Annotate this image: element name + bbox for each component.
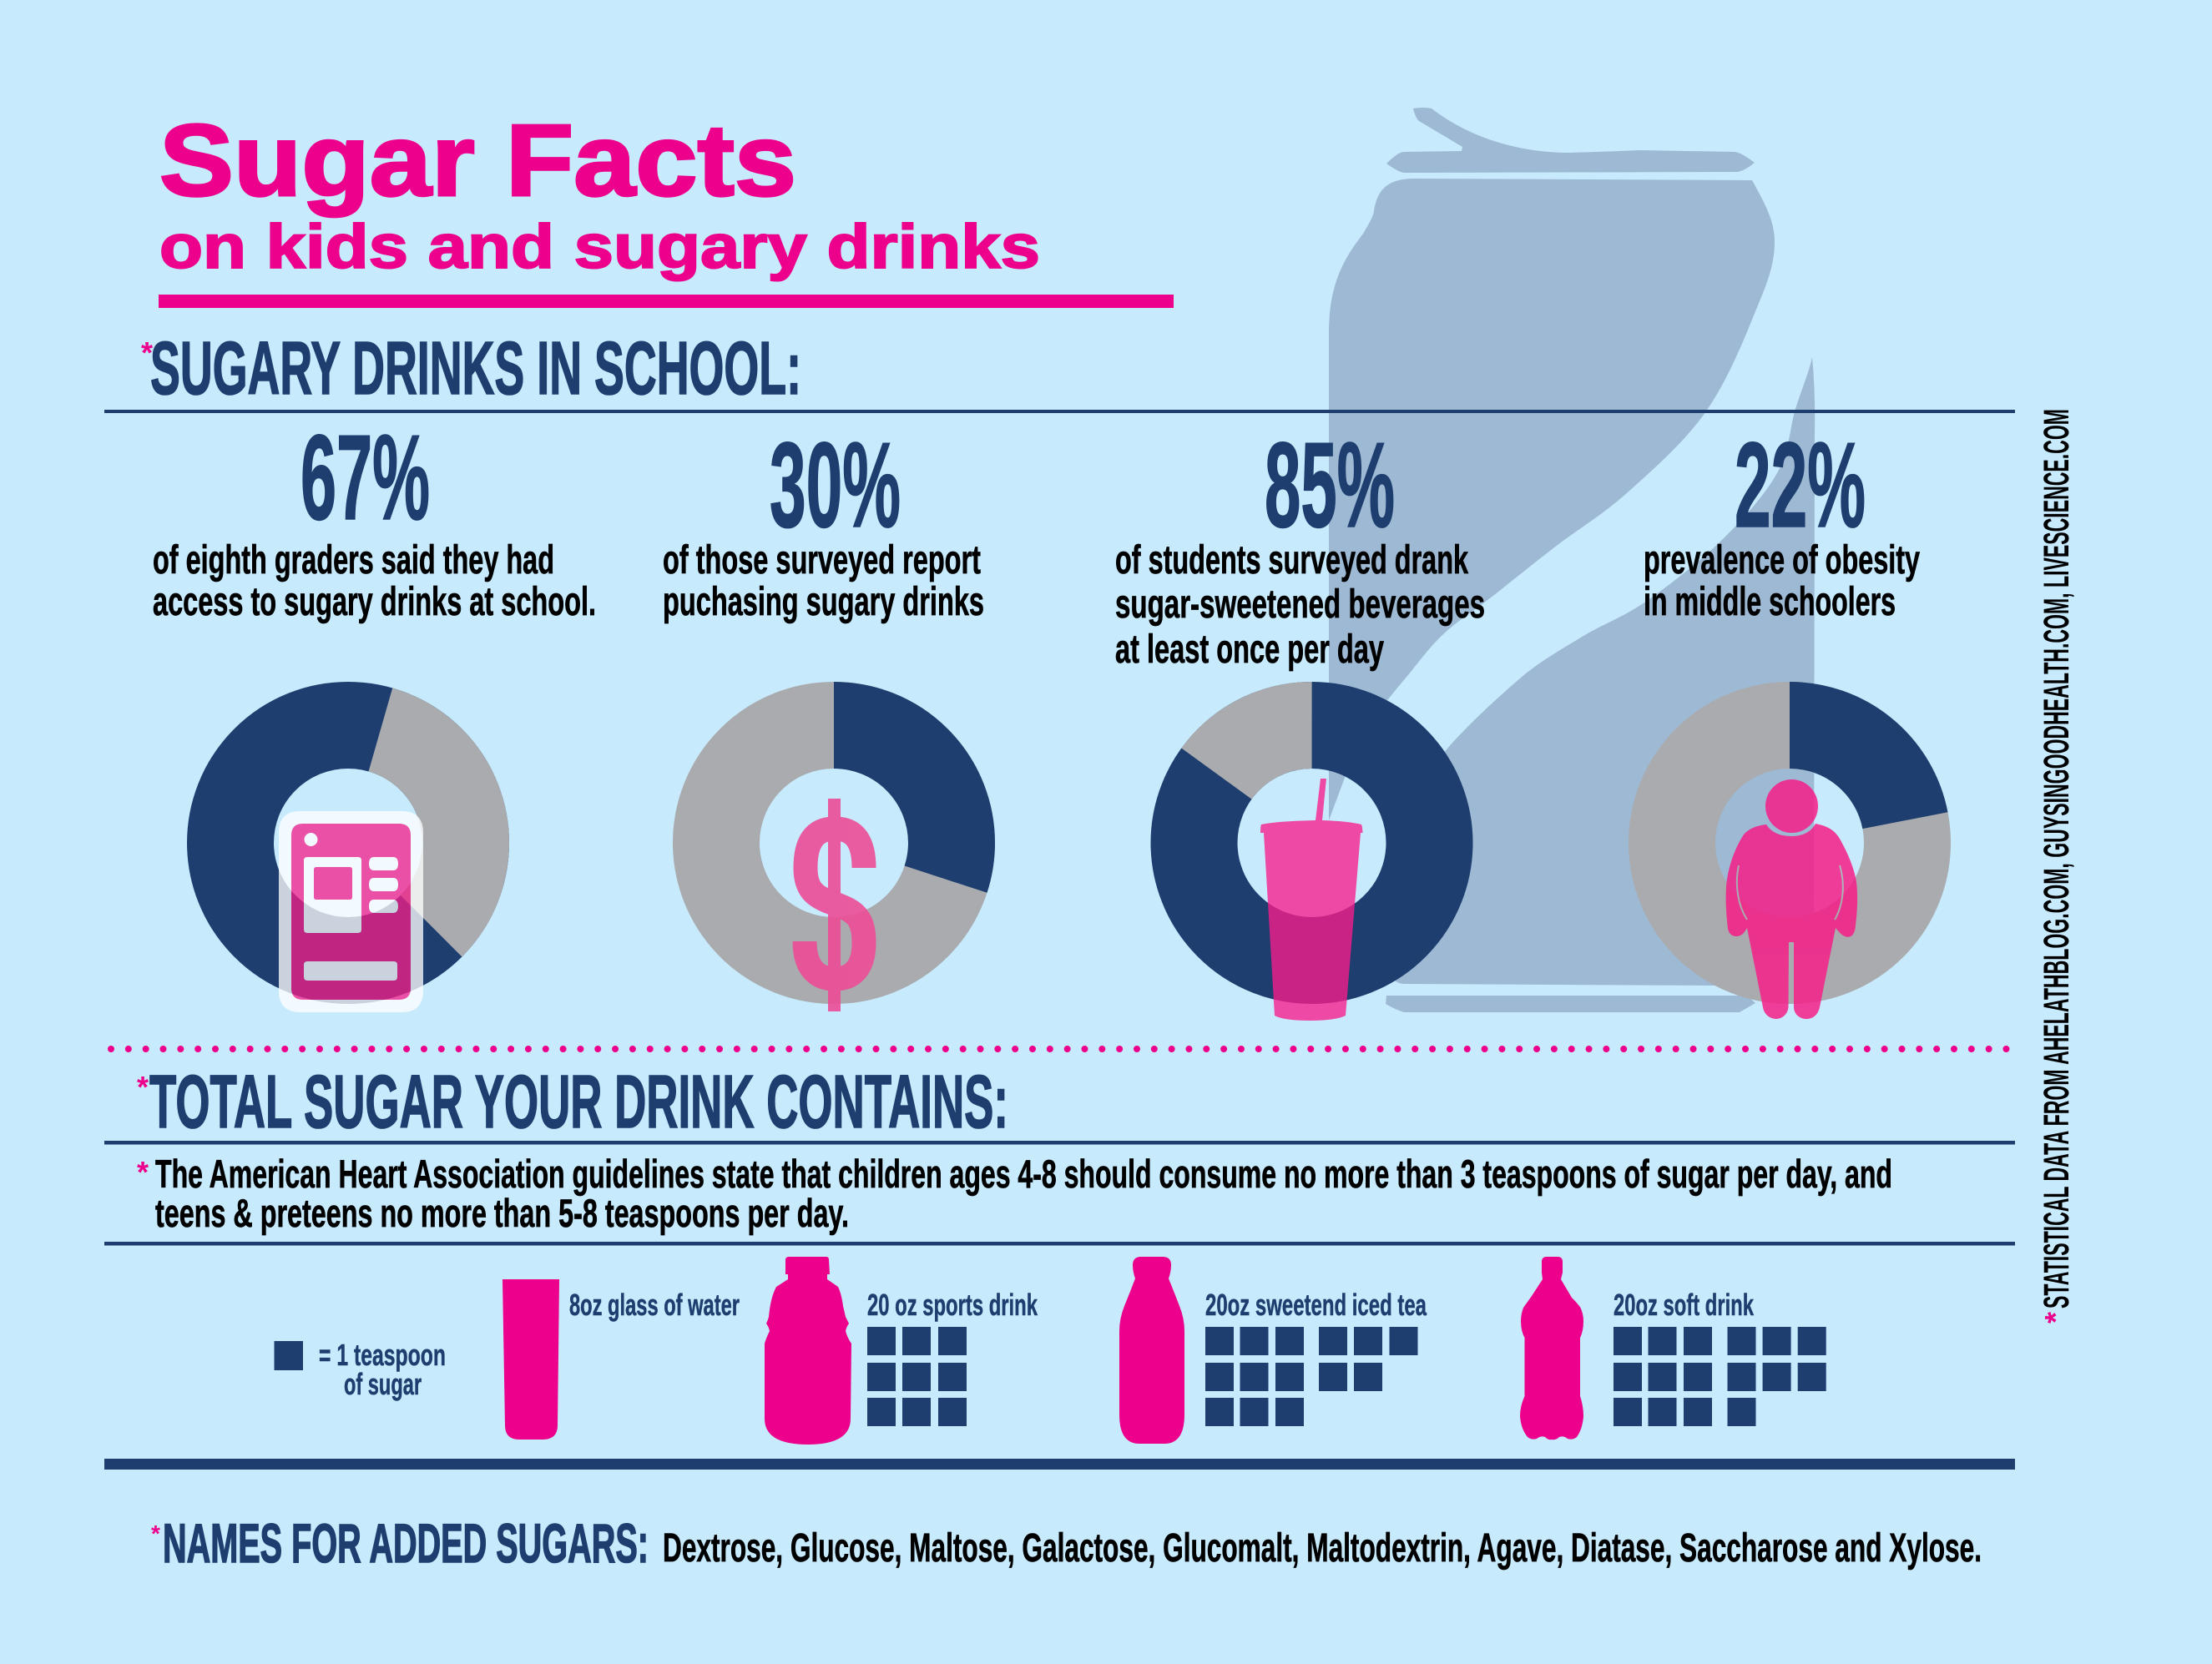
heading: sugary drinks in school: SUGARY DRINKS IN SCHOOL: xyxy=(150,327,801,411)
icon: iced tea bottle xyxy=(1119,1257,1184,1444)
stat: 30%: puchasing sugary drinks xyxy=(663,580,984,624)
icon: glass of water xyxy=(502,1279,559,1440)
title: on kids and sugary drinks xyxy=(159,212,1040,281)
soft drink: label and 16 teaspoons xyxy=(1614,1288,1826,1426)
heading: sugary drinks in school: * xyxy=(141,335,153,370)
iced tea: label and 14 teaspoons: 20oz sweetend iced tea xyxy=(1205,1288,1427,1322)
donut chart: 30% xyxy=(716,725,952,961)
stat: 67%: access to sugary drinks at school. xyxy=(153,580,596,624)
iced tea: label and 14 teaspoons xyxy=(1205,1288,1427,1426)
stat: 67%: of eighth graders said they had xyxy=(153,538,554,582)
names for added sugars xyxy=(151,1512,1982,1574)
icon: dollar sign xyxy=(805,799,864,1011)
stat: 22%: prevalence of obesity xyxy=(1644,538,1920,582)
icon: school vending machine card xyxy=(279,811,423,1012)
text: heart association guidelines: teens & preteens no more than 5-8 teaspoons per day. xyxy=(155,1191,849,1235)
heading: total sugar your drink contains xyxy=(137,1061,1008,1144)
vertical source note: * xyxy=(2038,1312,2073,1324)
stat: 30%: of those surveyed report xyxy=(663,538,981,582)
thick bottom rule xyxy=(104,1459,2015,1470)
stat: 22%: 22% xyxy=(1735,417,1866,552)
title xyxy=(159,103,1040,281)
stat: 85%: 85% xyxy=(1265,417,1395,552)
stat: 30% xyxy=(663,417,984,624)
stat: 22%: in middle schoolers xyxy=(1644,580,1896,624)
label: 8oz glass of water: 8oz glass of water xyxy=(569,1288,740,1322)
soft drink: label and 16 teaspoons: 20oz soft drink xyxy=(1614,1288,1755,1322)
legend: one teaspoon of sugar: = 1 teaspoon xyxy=(319,1338,446,1372)
stat: 85%: of students surveyed drank xyxy=(1115,538,1468,582)
legend: one teaspoon of sugar xyxy=(274,1338,446,1401)
title underline bar xyxy=(159,295,1174,308)
names for added sugars: NAMES FOR ADDED SUGARS: xyxy=(163,1512,649,1574)
names for added sugars: * xyxy=(151,1520,160,1546)
icon: soft drink bottle xyxy=(1520,1257,1583,1440)
vertical source note xyxy=(2037,409,2077,1324)
icon: sports drink bottle xyxy=(765,1257,851,1445)
sports drink: label and 9 teaspoons xyxy=(867,1288,1038,1426)
donut chart: 85% xyxy=(1148,678,1476,1007)
icon: overweight child xyxy=(1726,779,1857,1019)
legend: one teaspoon of sugar: of sugar xyxy=(344,1367,422,1401)
heading: total sugar your drink contains: * xyxy=(137,1070,149,1104)
icon: cup with straw xyxy=(1260,779,1362,1021)
sports drink: label and 9 teaspoons: 20 oz sports drink xyxy=(867,1288,1038,1322)
text: heart association guidelines: * xyxy=(137,1155,149,1189)
heading: total sugar your drink contains: TOTAL SUGAR YOUR DRINK CONTAINS: xyxy=(149,1061,1008,1144)
stat: 67% xyxy=(153,410,596,624)
heading: sugary drinks in school xyxy=(141,327,801,411)
stat: 85% xyxy=(1115,417,1485,672)
background illustration: soda can xyxy=(1329,108,1815,1012)
title: Sugar Facts xyxy=(159,103,796,217)
stat: 85%: at least once per day xyxy=(1115,628,1384,672)
stat: 30%: 30% xyxy=(770,417,901,552)
stat: 85%: sugar-sweetened beverages xyxy=(1115,582,1485,627)
donut chart: 22% xyxy=(1672,725,1907,961)
stat: 67%: 67% xyxy=(300,410,430,545)
stat: 22% xyxy=(1644,417,1920,624)
text: heart association guidelines xyxy=(137,1152,1892,1235)
dotted separator xyxy=(111,1046,2007,1052)
donut chart: 67% xyxy=(203,698,493,988)
